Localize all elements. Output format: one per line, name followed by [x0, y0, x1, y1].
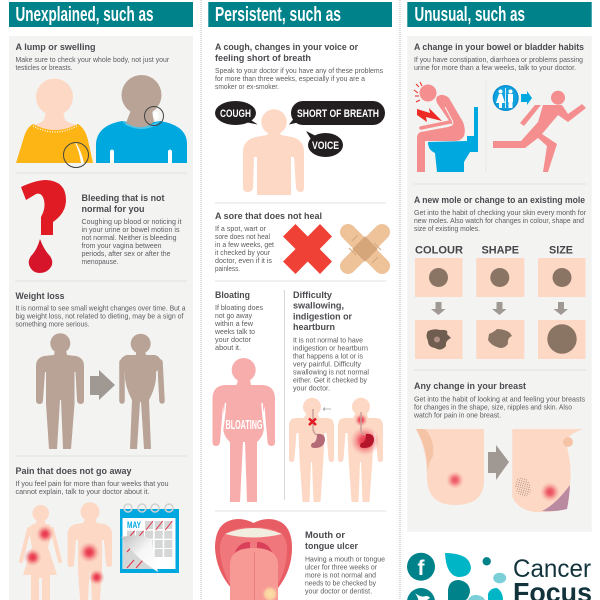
heading: cough — [215, 42, 358, 64]
text: mole — [414, 208, 587, 233]
text: bloating: If bloating does — [215, 303, 263, 312]
text: sore: doctor, even if it is — [215, 256, 272, 265]
column: persistent — [208, 2, 392, 600]
text: lump: testicles or breasts. — [16, 63, 72, 72]
section: bleeding — [21, 180, 182, 273]
text: lump — [16, 55, 170, 72]
heading: bowel: A change in your bowel or bladder habits — [414, 42, 584, 53]
section: mole — [414, 195, 587, 359]
heading: swallowing: Difficulty — [293, 290, 333, 301]
text: swallowing: that happens a lot or is — [293, 352, 363, 361]
text: sore: painless. — [215, 264, 240, 273]
column: unexplained — [9, 2, 193, 600]
heading: swallowing — [293, 290, 352, 333]
text: pain: If you feel pain for more than four weeks that you — [16, 479, 168, 488]
arrow: blue — [521, 91, 532, 105]
heading: weight loss: Weight loss — [16, 291, 64, 302]
text: pain — [16, 479, 168, 496]
text: swallowing: very painful. Difficulty — [293, 360, 361, 369]
boxes: moles before — [415, 258, 586, 297]
text: mouth ulcer: needs to be checked by — [305, 578, 376, 588]
text: mole: new moles. Also watch for changes in colour, shape and — [414, 216, 584, 225]
icon: running person — [493, 91, 586, 172]
heading: cough: A cough, changes in your voice or — [215, 42, 358, 53]
heading: bleeding: normal for you — [82, 204, 145, 215]
icon: bloated figure: BLOATING — [226, 417, 262, 432]
icon: calendar: MAY — [127, 520, 141, 530]
heading: sore: A sore that does not heal — [215, 211, 322, 222]
heading: pain: Pain that does not go away — [16, 466, 132, 477]
logo mark — [445, 553, 506, 600]
text: pain: cannot explain, talk to your doctor about it. — [16, 487, 150, 496]
text: bloating: about it. — [215, 343, 241, 352]
text: bowel — [414, 55, 583, 72]
text: swallowing: indigestion or heartburn — [293, 344, 368, 353]
column: unusual — [407, 2, 592, 600]
text: bloating: not go away — [215, 311, 252, 320]
text: bleeding: Coughing up blood or noticing it — [82, 217, 182, 226]
section: swallowing — [289, 290, 383, 502]
text: sore: sore does not heal — [215, 232, 270, 241]
text: bloating: your doctor — [215, 335, 252, 344]
heading: lump: A lump or swelling — [16, 42, 96, 53]
icon: question mark — [21, 180, 66, 235]
text: lump: Make sure to check your whole body, not just your — [16, 55, 170, 64]
text: sore: If a spot, wart or — [215, 224, 267, 233]
text: bowel: urine for more than a few weeks, talk to your doctor. — [414, 63, 576, 72]
heading: bloating: Bloating — [215, 290, 250, 301]
icon: woman with lump — [16, 78, 93, 168]
text: swallowing — [293, 336, 369, 393]
heading: swallowing: heartburn — [293, 322, 335, 333]
header: unexplained: Unexplained, such as — [16, 4, 154, 26]
section: bloating — [212, 290, 275, 502]
heading: mouth ulcer: Mouth or — [305, 530, 345, 541]
text: bleeding: from your vagina between — [82, 241, 162, 250]
icon: blood drop — [29, 239, 52, 273]
text: swallowing: either. Get it checked by — [293, 376, 367, 385]
icon: toilet — [428, 107, 478, 172]
heading: mouth ulcer — [305, 530, 358, 552]
header: persistent: Persistent, such as — [215, 4, 341, 26]
text: cough — [215, 66, 383, 91]
text: sore: in a few weeks, get — [215, 240, 274, 249]
section: bowel or bladder — [414, 42, 586, 172]
icon: man with lump — [96, 75, 187, 163]
icon: larger figure — [36, 333, 84, 449]
logo text: Cancer — [513, 555, 591, 583]
logo text — [513, 555, 592, 600]
speech bubble: short of breath — [289, 101, 385, 125]
icon: toilet sign — [493, 85, 519, 111]
text: breast: Get into the habit of looking at and feeling your breasts — [414, 395, 585, 404]
text: swallowing: swallowing is not normal — [293, 368, 369, 377]
heading: swallowing: swallowing, — [293, 300, 344, 312]
text: cough: for more than three weeks, especially if you are a — [215, 74, 365, 83]
header: unusual: Unusual, such as — [414, 4, 525, 26]
text: bleeding — [82, 217, 182, 266]
text: breast — [413, 395, 585, 420]
section: lump or swelling — [16, 42, 187, 168]
arrow: breast — [488, 445, 509, 480]
section: sore — [215, 211, 382, 274]
icon: open mouth with tongue ulcer — [215, 519, 292, 600]
text: weight loss: It is normal to see small weight changes over time. But a — [16, 304, 186, 313]
arrow: weight loss — [90, 370, 115, 400]
icon: calendar — [120, 504, 179, 573]
icon: figure with heartburn — [338, 398, 383, 502]
section: weight loss — [16, 291, 186, 449]
text: mouth ulcer: your doctor or dentist. — [305, 586, 372, 596]
panel: unusual symptoms — [407, 36, 592, 532]
heading: mole: A new mole or change to an existing mole — [414, 195, 585, 206]
icon: red cross — [283, 224, 332, 274]
text: swallowing: It is not normal to have — [293, 336, 363, 345]
heading: mouth ulcer: tongue ulcer — [305, 541, 358, 552]
text: weight loss — [16, 304, 186, 329]
text: bleeding: menopause. — [82, 257, 118, 266]
text: breast: for changes in the shape, size, nipples and skin. Also — [414, 403, 572, 412]
text: sore — [215, 224, 274, 273]
heading: breast: Any change in your breast — [414, 381, 527, 392]
text: bleeding: in your urine or bowel motion is — [82, 225, 180, 234]
text: mouth ulcer: ulcer for three weeks or — [305, 563, 378, 572]
icon: facebook — [407, 553, 435, 581]
icon: man with pain spots — [68, 502, 112, 600]
text: weight loss: something more serious. — [16, 320, 90, 329]
heading: swallowing: indigestion or — [293, 312, 352, 322]
text: mouth ulcer — [305, 555, 385, 596]
icon: figure with blocked gullet — [289, 398, 334, 502]
text: bleeding: not normal. Neither is bleeding — [82, 233, 177, 242]
text: bloating — [214, 303, 263, 352]
text: mouth ulcer: Having a mouth or tongue — [305, 555, 385, 564]
panel: unexplained symptoms — [9, 36, 193, 600]
labels: mole changes — [415, 244, 573, 256]
text: cough: smoker or ex-smoker. — [215, 82, 279, 91]
heading: cough: feeling short of breath — [215, 53, 311, 64]
icon: slimmer figure — [120, 334, 162, 449]
labels: mole changes: COLOUR — [415, 244, 463, 256]
section: pain — [16, 466, 179, 600]
text: bleeding: periods, after sex or after the — [82, 249, 170, 258]
logo: cancer focus — [407, 553, 592, 600]
text: cough: Speak to your doctor if you have any of these problems — [215, 66, 383, 75]
text: bloating: weeks talk to — [214, 327, 255, 336]
text: mole: size of existing moles. — [414, 224, 480, 233]
speech bubble: short of breath: SHORT OF BREATH — [297, 108, 379, 120]
text: swallowing: your doctor. — [293, 384, 330, 393]
text: bowel: If you have constipation, diarrhoea or problems passing — [414, 55, 583, 64]
text: weight loss: big weight loss, not related to dieting, may be a sign of — [16, 312, 184, 321]
icon: person in pain on toilet — [414, 82, 465, 172]
icon: crossed plasters — [348, 232, 382, 266]
speech bubble: voice — [306, 131, 343, 157]
heading: bleeding: Bleeding that is not — [82, 193, 165, 204]
icon: facebook: f — [418, 557, 426, 580]
speech bubble: voice: VOICE — [312, 140, 339, 152]
icon: bloated figure — [212, 358, 275, 502]
text: breast: watch for pain in one breast. — [413, 410, 501, 420]
speech bubble: cough: COUGH — [220, 108, 251, 120]
labels: mole changes: SHAPE — [482, 244, 519, 256]
icon: torso figure — [243, 109, 304, 195]
text: mouth ulcer: more is not normal and — [305, 570, 376, 580]
text: sore: it checked by your — [215, 248, 271, 257]
icon: woman with pain spots — [21, 505, 60, 600]
speech bubble: cough — [215, 101, 258, 125]
text: mole: Get into the habit of checking your skin every month for — [414, 208, 587, 217]
heading: bleeding — [82, 193, 165, 215]
boxes: moles after — [415, 320, 586, 359]
section: breast — [413, 381, 585, 512]
icon: changed breast — [512, 429, 583, 512]
icon: healthy breast — [416, 429, 484, 505]
labels: mole changes: SIZE — [549, 244, 573, 256]
section: mouth ulcer — [215, 519, 385, 600]
section: cough — [215, 42, 385, 195]
icon: twitter — [407, 588, 435, 600]
arrows: moles — [431, 302, 568, 315]
text: bloating: within a few — [214, 319, 254, 328]
